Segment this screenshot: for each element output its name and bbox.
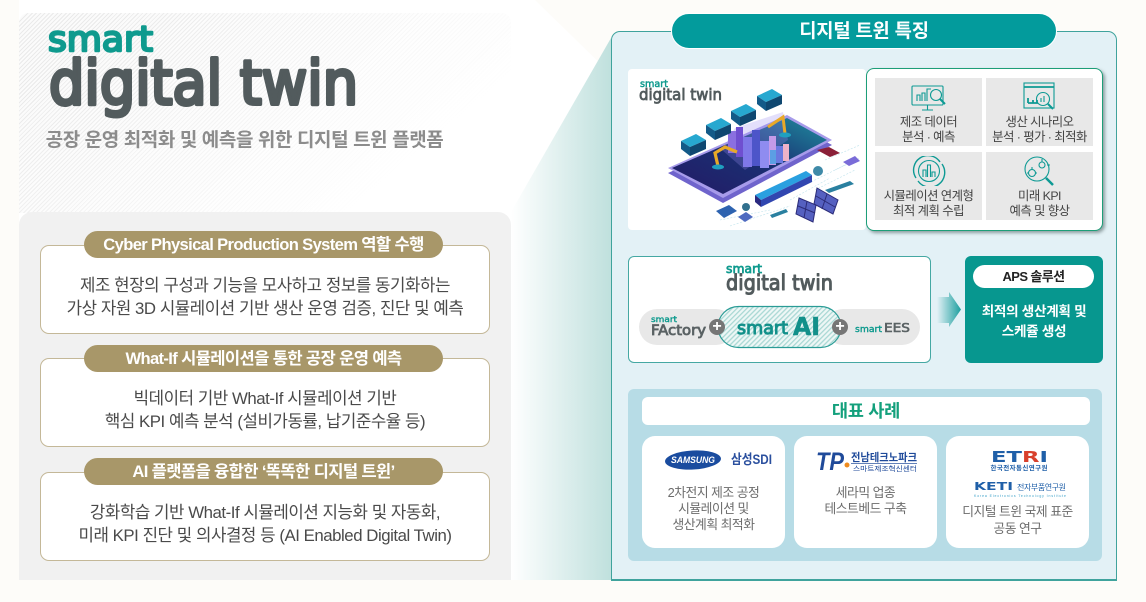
composition logo: digital twin (726, 271, 833, 295)
feature pill 3 (84, 458, 443, 485)
arrow (938, 292, 961, 327)
logos: ETRI and KETI: ET R I (991, 448, 1048, 466)
logo: TP Jeonnam Technopark: 스마트제조혁신센터 (853, 464, 917, 473)
robot arm 1 (712, 147, 737, 170)
feature text 1 (67, 276, 463, 318)
APS description (982, 304, 1086, 339)
APS label: APS 솔루션 (1002, 269, 1065, 284)
feature text 1: 제조 현장의 구성과 기능을 모사하고 정보를 동기화하는 (80, 276, 450, 295)
icon: window with chart magnifier (1023, 82, 1055, 110)
logos: ETRI and KETI: 한국전자통신연구원 (990, 463, 1048, 472)
feature cell: manufacturing data (875, 78, 982, 146)
feature cell: manufacturing data: 분석 · 예측 (902, 130, 955, 144)
feature text 2: 빅데이터 기반 What-If 시뮬레이션 기반 (134, 389, 396, 408)
feature cell: manufacturing data: 제조 데이터 (900, 115, 957, 129)
logos: ETRI and KETI: 전자부품연구원 (1017, 482, 1066, 492)
feature text 1: 가상 자원 3D 시뮬레이션 기반 생산 운영 검증, 진단 및 예측 (67, 299, 463, 318)
case text (825, 485, 906, 516)
feature text 2 (105, 389, 425, 431)
logo word: smart: smart (48, 20, 153, 60)
case text: 디지털 트윈 국제 표준 (962, 504, 1073, 519)
illustration logo: digital twin (639, 85, 722, 104)
feature box 2 (40, 358, 490, 447)
case text (962, 504, 1073, 536)
panel: left feature list (19, 212, 511, 580)
feature cell: future KPI (986, 152, 1093, 220)
feature cell: simulation planning (875, 152, 982, 220)
feature cell: production scenario: 분석 · 평가 · 최적화 (992, 130, 1087, 144)
feature box 1 (40, 245, 490, 334)
logo: TP Jeonnam Technopark: 전남테크노파크 (851, 450, 917, 464)
feature pill 1 (84, 231, 443, 258)
logo: TP Jeonnam Technopark: TP (816, 448, 844, 476)
plus icon right: + (835, 318, 845, 335)
panel: digital twin features (611, 31, 1117, 581)
small chips (716, 147, 860, 222)
cases heading: 대표 사례 (832, 401, 900, 421)
composition logo (726, 262, 833, 295)
logo: Samsung SDI (665, 450, 772, 470)
case text: 시뮬레이션 및 (678, 501, 749, 516)
pill: smart AI (718, 306, 840, 348)
plus icon left (709, 319, 725, 335)
pill: smart EES (834, 309, 920, 345)
panel: hatched title background (19, 13, 511, 213)
panel: APS solution (965, 256, 1103, 363)
APS description: 스케쥴 생성 (1002, 324, 1066, 339)
circuit traces (720, 145, 860, 226)
case text: 세라믹 업종 (836, 485, 895, 500)
logos: ETRI and KETI: Korea Electronics Technology Institute (974, 494, 1066, 498)
feature pill 2 (84, 345, 443, 372)
panel heading pill: 디지털 트윈 특징 (799, 20, 929, 41)
pill: smart AI: smart (737, 318, 788, 339)
feature text 3: 강화학습 기반 What-If 시뮬레이션 지능화 및 자동화, (90, 503, 440, 522)
APS description: 최적의 생산계획 및 (982, 304, 1086, 319)
smartphone slab (668, 115, 832, 203)
pill: smart EES: smart (855, 325, 882, 335)
case text: 테스트베드 구축 (825, 501, 906, 516)
data cube 1 (681, 134, 706, 156)
pill: smart EES: EES (884, 321, 910, 335)
case card: ETRI and KETI (946, 436, 1089, 548)
plus icon left: + (712, 318, 722, 335)
logos: ETRI and KETI: KETI (974, 480, 1013, 493)
feature cell: production scenario: 생산 시나리오 (1006, 115, 1074, 129)
city hologram (722, 112, 789, 170)
feature cell: future KPI: 예측 및 향상 (1009, 204, 1070, 218)
feature text 3 (78, 503, 452, 545)
feature pill 1: Cyber Physical Production System 역할 수행 (103, 235, 424, 254)
feature text 3: 미래 KPI 진단 및 의사결정 등 (AI Enabled Digital Twin) (78, 526, 452, 545)
feature pill 2: What-If 시뮬레이션을 통한 공장 운영 예측 (125, 349, 402, 368)
feature cell: production scenario (986, 78, 1093, 146)
illustration logo: smart (640, 79, 668, 90)
pill: smart factory (639, 309, 724, 345)
subtitle: 공장 운영 최적화 및 예측을 위한 디지털 트윈 플랫폼 (46, 130, 443, 151)
logo: TP Jeonnam Technopark (816, 448, 917, 476)
conveyor bar (755, 171, 812, 207)
pill: smart factory: FActory (651, 323, 706, 339)
solar panels (796, 188, 838, 222)
composition logo: smart (726, 262, 762, 276)
panel heading pill (671, 13, 1057, 49)
case text: 생산계획 최적화 (673, 517, 754, 532)
robot arm 2 (768, 117, 791, 138)
case text: 공동 연구 (993, 521, 1042, 536)
feature cell: future KPI: 미래 KPI (1018, 189, 1061, 203)
data cube 3 (731, 104, 756, 126)
connector wedge from left panel to right panel (524, 38, 611, 580)
cases heading (642, 397, 1090, 425)
logo: Samsung SDI: SAMSUNG (671, 455, 715, 465)
case text (668, 485, 759, 532)
APS label (973, 265, 1094, 288)
feature box 3 (40, 472, 490, 561)
panel: smart AI composition (628, 256, 931, 363)
data cube 2 (706, 118, 731, 140)
pill: smart AI: AI (793, 312, 820, 341)
icon: gears under magnifier (1024, 156, 1054, 186)
case text: 2차전지 제조 공정 (668, 485, 759, 500)
pill: smart factory: smart (651, 315, 677, 324)
data cube 4 (757, 89, 782, 111)
case card: Jeonnam Technopark (794, 436, 937, 548)
panel: feature grid (866, 68, 1103, 231)
icon: cycle with bars (912, 156, 946, 186)
illustration panel: platform on smartphone (628, 69, 866, 230)
plus icon right (832, 319, 848, 335)
feature cell: simulation planning: 시뮬레이션 연계형 (884, 189, 973, 203)
title logo: smart digital twin (48, 20, 358, 119)
icon: monitor with magnifier (911, 86, 946, 110)
feature pill 3: AI 플랫폼을 융합한 ‘똑똑한 디지털 트윈’ (132, 462, 395, 481)
logos: ETRI and KETI (974, 448, 1066, 498)
feature cell: simulation planning: 최적 계획 수립 (893, 204, 964, 218)
panel: representative cases (628, 389, 1102, 561)
feature text 2: 핵심 KPI 예측 분석 (설비가동률, 납기준수율 등) (105, 412, 425, 431)
case card: Samsung SDI (642, 436, 785, 548)
